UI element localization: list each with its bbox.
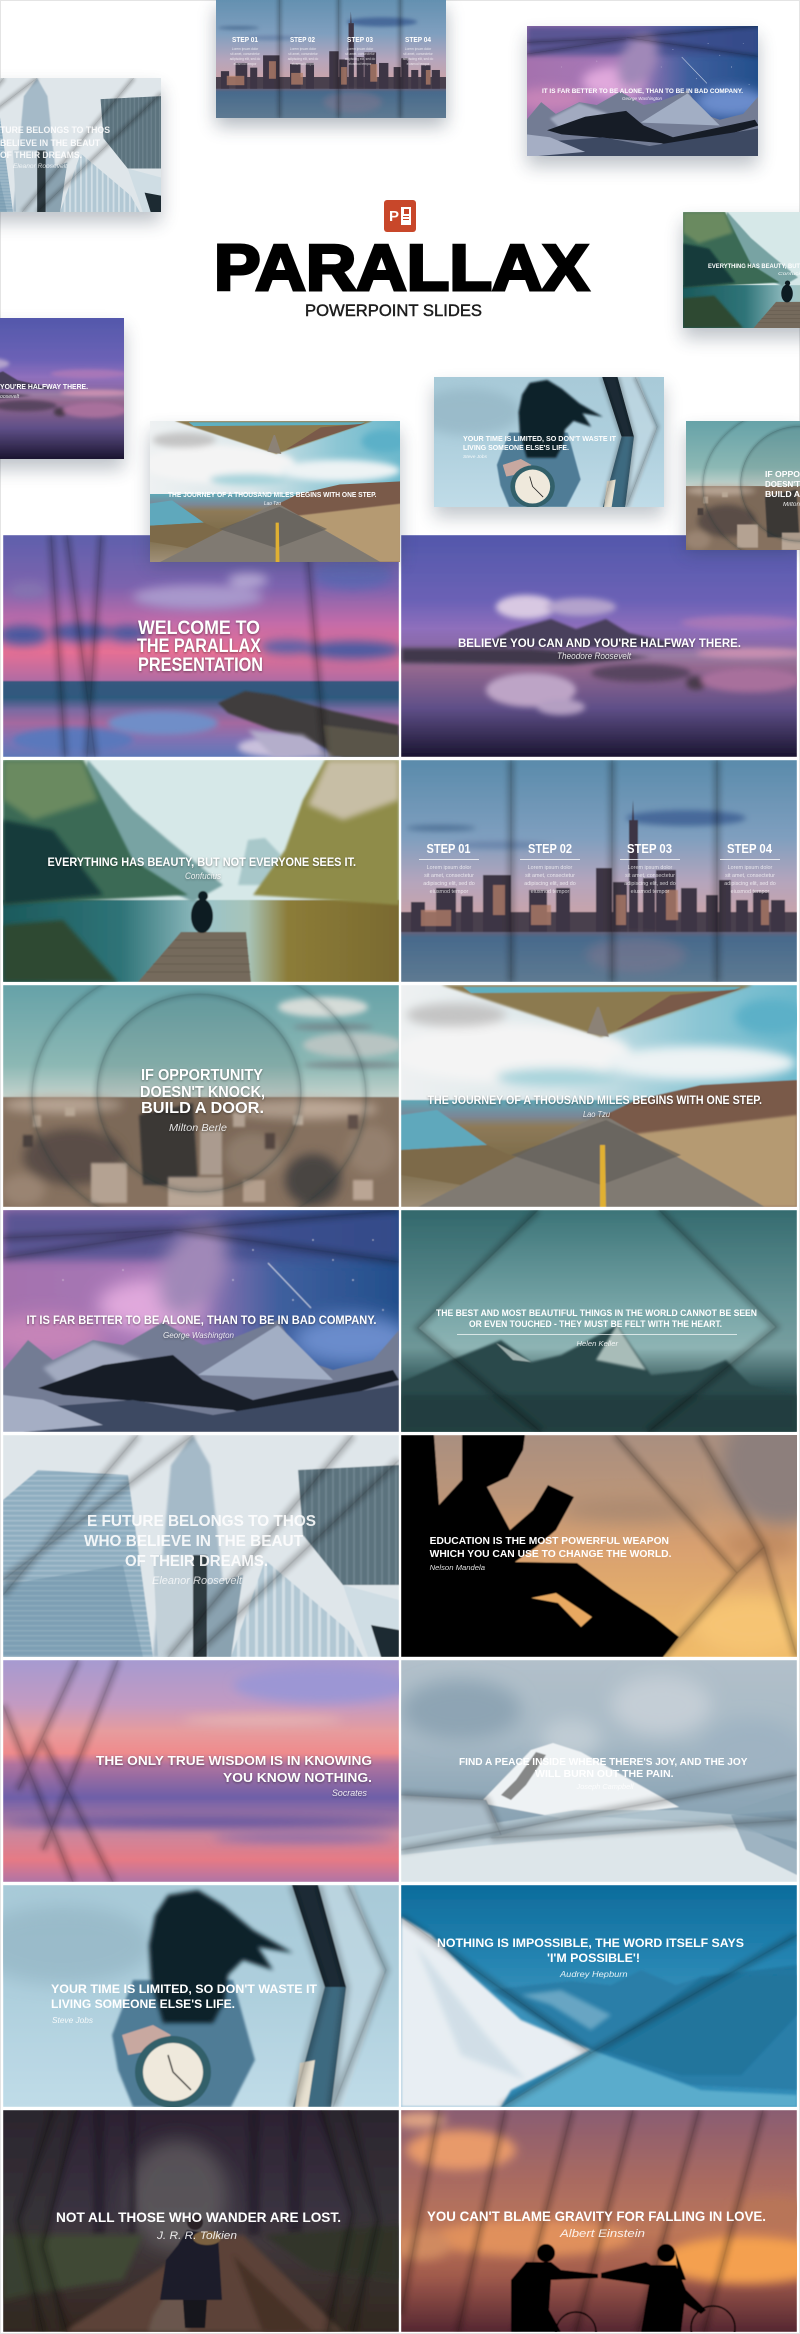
quote: YOU CAN'T BLAME GRAVITY FOR FALLING IN LOVE.	[427, 2209, 766, 2224]
quote: EDUCATION IS THE MOST POWERFUL WEAPON	[430, 1535, 669, 1547]
thumbnail: city steps: eiusmod tempor	[234, 62, 257, 66]
quote: IF OPPORTUNITY	[141, 1067, 264, 1084]
quote	[51, 1982, 317, 2025]
quote: OF THEIR DREAMS.	[125, 1553, 268, 1570]
quote: Helen Keller	[576, 1339, 619, 1348]
quote: Lao Tzu	[583, 1110, 611, 1119]
slide: true wisdom	[3, 1660, 413, 1882]
thumbnail: city steps: eiusmod tempor	[349, 62, 372, 66]
quote	[437, 1936, 744, 1979]
slide: find a peace inside	[401, 1660, 800, 1882]
heading: welcome: THE PARALLAX	[137, 636, 261, 657]
step 02: eiusmod tempor	[531, 889, 570, 895]
thumbnail: city steps: STEP 04	[405, 37, 431, 44]
quote: THE BEST AND MOST BEAUTIFUL THINGS IN THE WORLD CANNOT BE SEEN	[436, 1308, 757, 1319]
quote	[428, 1095, 762, 1119]
thumbnail: skyscrapers	[0, 78, 162, 222]
thumbnail: woman with clock	[415, 377, 665, 517]
photo: glass skyscrapers with diagonal folds	[3, 1435, 399, 1657]
photo: snowy peak under clouds	[401, 1660, 800, 1882]
step 02	[520, 842, 580, 895]
step 01: eiusmod tempor	[430, 889, 469, 895]
subtitle: POWERPOINT SLIDES	[305, 301, 482, 320]
quote: Steve Jobs	[52, 2015, 94, 2025]
heading: welcome: WELCOME TO	[138, 618, 260, 639]
photo: woman holding a clock	[0, 1885, 399, 2108]
quote	[459, 1756, 748, 1791]
heading: welcome: PRESENTATION	[138, 655, 263, 676]
title: PARALLAX	[214, 231, 589, 304]
step 04: sit amet, consectetur	[725, 873, 775, 879]
thumbnail: lake: EVERYTHING HAS BEAUTY, BUT	[708, 264, 800, 270]
quote: Milton Berle	[169, 1122, 227, 1134]
quote: NOTHING IS IMPOSSIBLE, THE WORD ITSELF SAYS	[437, 1936, 744, 1950]
thumbnail: city arch: BUILD A	[765, 489, 800, 499]
quote: LIVING SOMEONE ELSE'S LIFE.	[51, 1997, 235, 2011]
slide: your time is limited	[0, 1885, 399, 2108]
step 01: Lorem ipsum dolor	[427, 865, 472, 871]
thumbnail: city steps: Lorem ipsum dolor	[347, 47, 374, 51]
thumbnail: galaxy: George Washington	[622, 96, 662, 101]
thumbnail: city arch	[685, 406, 800, 566]
heading: welcome	[137, 618, 263, 676]
step 01: sit amet, consectetur	[424, 873, 474, 879]
step 02: STEP 02	[528, 842, 572, 856]
step 04: eiusmod tempor	[731, 889, 770, 895]
photo: desert road with clouds	[391, 985, 800, 1207]
slide: journey of a thousand miles	[391, 985, 800, 1207]
quote: IT IS FAR BETTER TO BE ALONE, THAN TO BE IN BAD COMPANY.	[26, 1313, 376, 1327]
quote: Eleanor Roosevelt	[152, 1575, 243, 1587]
quote	[140, 1067, 265, 1134]
thumbnail: purple reflection	[0, 318, 130, 469]
photo: milky way over snowy mountains	[0, 1210, 413, 1432]
step 03	[620, 842, 680, 895]
thumbnail: city steps: sit amet, consectetur	[230, 52, 261, 56]
photo: city skyline with vertical folds	[401, 760, 797, 982]
photo: lake and mountains with person on dock	[3, 760, 399, 982]
thumbnail: city steps: Lorem ipsum dolor	[290, 47, 317, 51]
thumbnail: desert road: THE JOURNEY OF A THOUSAND MILES BEGINS WITH ONE STEP.	[168, 492, 377, 499]
step 03: eiusmod tempor	[631, 889, 670, 895]
quote: George Washington	[163, 1331, 235, 1340]
slide: nothing is impossible	[401, 1885, 797, 2107]
thumbnail: city steps: Lorem ipsum dolor	[405, 47, 432, 51]
thumbnail: city steps: STEP 01	[232, 37, 258, 44]
quote: Socrates	[332, 1788, 367, 1799]
quote: WHICH YOU CAN USE TO CHANGE THE WORLD.	[430, 1548, 672, 1560]
photo: teal mountains with diamond folds	[401, 1210, 797, 1432]
quote	[56, 2210, 341, 2242]
step 01: STEP 01	[426, 842, 471, 856]
slide: not all who wander	[3, 2110, 399, 2332]
quote	[430, 1535, 672, 1572]
photo: purple mountain reflection	[401, 535, 800, 757]
quote	[48, 855, 356, 881]
quote: OR EVEN TOUCHED - THEY MUST BE FELT WITH THE HEART.	[469, 1319, 722, 1330]
slide: believe you can	[401, 535, 800, 757]
thumbnail: galaxy	[515, 26, 767, 166]
thumbnail: city steps: adipiscing elit, sed do	[345, 57, 375, 61]
thumbnail: lake	[683, 212, 800, 338]
thumbnail: city steps: adipiscing elit, sed do	[230, 57, 260, 61]
slide: far better to be alone	[0, 1210, 413, 1432]
quote: Joseph Campbell	[576, 1782, 634, 1791]
slide: education	[401, 1405, 800, 1657]
thumbnail: city steps: sit amet, consectetur	[403, 52, 434, 56]
step 04: Lorem ipsum dolor	[728, 865, 773, 871]
step 04	[720, 842, 780, 895]
thumbnail: skyscrapers: BELIEVE IN THE BEAUT	[0, 138, 100, 148]
step 04: STEP 04	[727, 842, 772, 856]
thumbnail: city steps: adipiscing elit, sed do	[288, 57, 318, 61]
thumbnail: city steps: eiusmod tempor	[292, 62, 315, 66]
thumbnail: woman with clock: Steve Jobs	[463, 454, 488, 460]
thumbnail: woman with clock: LIVING SOMEONE ELSE'S LIFE.	[463, 445, 569, 452]
quote: WILL BURN OUT THE PAIN.	[535, 1768, 674, 1780]
quote: Audrey Hepburn	[559, 1969, 628, 1979]
quote	[436, 1308, 757, 1348]
slide: everything has beauty	[3, 760, 399, 982]
quote	[427, 2209, 766, 2240]
thumbnail: city steps: STEP 03	[347, 37, 373, 44]
thumbnail: woman with clock: YOUR TIME IS LIMITED, SO DON'T WASTE IT	[463, 436, 617, 443]
thumbnail: city steps: adipiscing elit, sed do	[403, 57, 433, 61]
thumbnail: skyscrapers: OF THEIR DREAMS.	[0, 150, 82, 160]
step 01: adipiscing elit, sed do	[423, 881, 475, 887]
quote: 'I'M POSSIBLE'!	[547, 1951, 640, 1965]
step 03: STEP 03	[627, 842, 672, 856]
thumbnail: city arch: Milton	[783, 502, 800, 508]
quote: YOU KNOW NOTHING.	[223, 1770, 372, 1785]
quote	[84, 1513, 316, 1587]
photo: aerial city with arch folds	[1, 959, 403, 1235]
step 02: adipiscing elit, sed do	[524, 881, 576, 887]
quote: J. R. R. Tolkien	[156, 2230, 237, 2242]
quote: BELIEVE YOU CAN AND YOU'RE HALFWAY THERE.	[458, 636, 741, 650]
quote: THE JOURNEY OF A THOUSAND MILES BEGINS WITH ONE STEP.	[428, 1095, 762, 1107]
quote: DOESN'T KNOCK,	[140, 1084, 265, 1101]
quote	[458, 636, 741, 661]
thumbnail: desert road: Lao Tzu	[264, 501, 281, 507]
thumbnail: desert road	[143, 421, 407, 565]
thumbnail: city steps: Lorem ipsum dolor	[232, 47, 259, 51]
quote: Nelson Mandela	[430, 1563, 485, 1572]
thumbnail: purple reflection: oosevelt	[0, 394, 19, 400]
step 04: adipiscing elit, sed do	[724, 881, 776, 887]
step 02: Lorem ipsum dolor	[528, 865, 573, 871]
slide: best and most beautiful things	[401, 1210, 797, 1432]
slide: gravity	[391, 2110, 800, 2334]
thumbnail: city steps: sit amet, consectetur	[345, 52, 376, 56]
quote: THE ONLY TRUE WISDOM IS IN KNOWING	[96, 1753, 372, 1768]
quote: Confucius	[185, 871, 222, 881]
thumbnail: city steps: sit amet, consectetur	[288, 52, 319, 56]
quote	[26, 1313, 376, 1340]
quote: E FUTURE BELONGS TO THOS	[87, 1513, 316, 1530]
photo: blue snowy mountains with V fold	[401, 1885, 797, 2107]
quote: Albert Einstein	[559, 2228, 645, 2240]
thumbnail: city steps: eiusmod tempor	[407, 62, 430, 66]
slide: future belongs	[3, 1435, 399, 1657]
icon: powerpoint	[384, 200, 416, 232]
photo: sunset sea with folded panels	[0, 535, 403, 757]
thumbnail: lake: Confuci	[778, 271, 800, 276]
step 03: Lorem ipsum dolor	[628, 865, 673, 871]
quote: BUILD A DOOR.	[141, 1100, 264, 1117]
slide: if opportunity	[1, 959, 403, 1235]
quote	[96, 1753, 372, 1799]
step 03: adipiscing elit, sed do	[624, 881, 676, 887]
thumbnail: skyscrapers: Eleanor Roosevelt	[13, 163, 68, 170]
slide: four steps city	[401, 760, 797, 982]
photo: couple silhouettes at sunset	[391, 2110, 800, 2334]
thumbnail: purple reflection: YOU'RE HALFWAY THERE.	[0, 382, 88, 391]
step 03: sit amet, consectetur	[625, 873, 675, 879]
quote: EVERYTHING HAS BEAUTY, BUT NOT EVERYONE SEES IT.	[48, 855, 356, 869]
quote: FIND A PEACE INSIDE WHERE THERE'S JOY, AND THE JOY	[459, 1756, 748, 1768]
thumbnail: galaxy: IT IS FAR BETTER TO BE ALONE, THAN TO BE IN BAD COMPANY.	[542, 88, 743, 95]
icon: powerpoint: P	[389, 208, 399, 225]
step 02: sit amet, consectetur	[525, 873, 575, 879]
quote: WHO BELIEVE IN THE BEAUT	[84, 1533, 303, 1550]
thumbnail: city steps	[215, 0, 447, 126]
thumbnail: skyscrapers: TURE BELONGS TO THOS	[0, 125, 110, 135]
quote: NOT ALL THOSE WHO WANDER ARE LOST.	[56, 2210, 341, 2225]
thumbnail: city arch: IF OPPO	[765, 469, 800, 479]
thumbnail: city steps: STEP 02	[290, 37, 315, 44]
photo: silhouette reading at sunset	[401, 1405, 800, 1657]
photo: walker on a forest path	[3, 2110, 399, 2332]
step 01	[419, 842, 479, 895]
photo: pink and purple beach sunset	[3, 1660, 413, 1882]
quote: YOUR TIME IS LIMITED, SO DON'T WASTE IT	[51, 1982, 317, 1996]
quote: Theodore Roosevelt	[557, 651, 632, 661]
slide: welcome to the parallax presentation	[0, 535, 403, 757]
